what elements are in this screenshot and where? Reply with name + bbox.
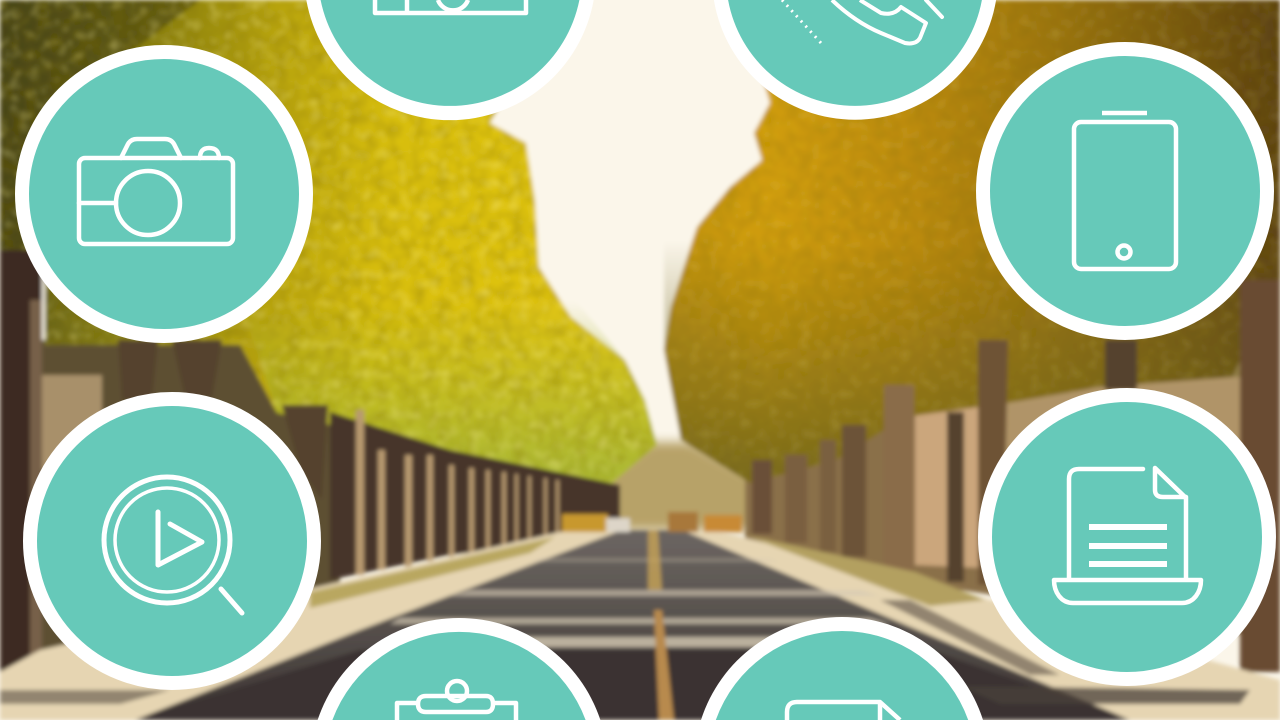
right canopy — [664, 0, 1280, 483]
circle: document on laptop — [985, 395, 1269, 679]
disc — [728, 0, 982, 106]
disc — [332, 632, 586, 720]
dark upper-left shadow — [0, 0, 200, 250]
circle: top-right phone — [714, 0, 996, 120]
colonnade of left trunks — [330, 410, 620, 580]
circle: top-left camera — [306, 0, 594, 120]
left background building — [42, 375, 102, 470]
icon: document (cropped) — [787, 702, 900, 720]
icon: tablet — [1074, 113, 1176, 269]
road light bands — [380, 558, 890, 647]
icon: telephone handset (cropped) — [782, 0, 942, 43]
right background behind trunks — [745, 400, 1280, 640]
right sidewalk shadow — [880, 600, 1060, 675]
ground: sidewalks — [0, 532, 1280, 720]
icon: camera (cropped) — [375, 0, 526, 13]
distant trees — [570, 442, 760, 530]
right canopy lower shade — [664, 240, 1280, 483]
ring — [306, 0, 594, 120]
icon: clipboard (cropped) — [397, 681, 516, 720]
disc — [716, 631, 968, 720]
right foliage texture — [660, 0, 1280, 490]
distant cars and hedges — [562, 512, 742, 532]
left foliage texture — [0, 0, 660, 490]
left grass strip — [310, 537, 555, 608]
right grass strip — [745, 535, 985, 606]
circle: tablet — [983, 49, 1267, 333]
road dark lower shadow — [135, 650, 1130, 720]
disc — [321, 0, 579, 106]
circle: camera — [22, 52, 306, 336]
left canopy — [0, 0, 657, 483]
bottom-left shadow band — [0, 690, 170, 704]
ring — [318, 618, 600, 720]
road centre line lower — [654, 610, 674, 720]
other trunks — [0, 250, 1280, 672]
icon: document on laptop — [1054, 468, 1201, 603]
right far wall — [1003, 360, 1240, 600]
road — [135, 530, 1130, 720]
circle: document — [701, 617, 983, 720]
left background behind trunks — [42, 340, 340, 650]
right tan wall — [915, 400, 985, 568]
ring — [714, 0, 996, 120]
road centre line — [648, 530, 662, 590]
icon: camera — [79, 139, 233, 244]
bottom-right shadow band — [960, 686, 1250, 704]
circle: clipboard — [318, 618, 600, 720]
greener lower foliage — [240, 300, 657, 483]
ring — [701, 617, 983, 720]
icon: magnifier with play — [104, 477, 242, 613]
sky — [0, 0, 1280, 530]
circle: video search — [30, 399, 314, 683]
lit trunk stripes — [356, 410, 559, 575]
